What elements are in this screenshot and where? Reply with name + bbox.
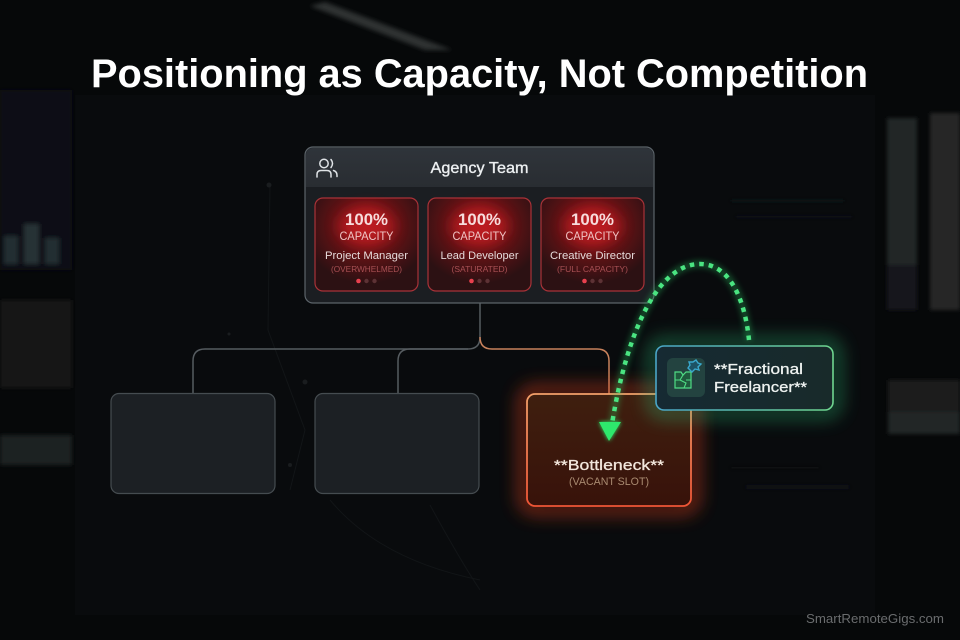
card: lead developer: 100% bbox=[458, 210, 501, 229]
panel: fractional freelancer: Freelancer** bbox=[714, 380, 807, 396]
panel: bottleneck vacant slot: **Bottleneck** bbox=[554, 458, 664, 474]
card: project manager: CAPACITY bbox=[340, 231, 394, 243]
card: lead developer: Lead Developer bbox=[440, 250, 519, 262]
empty role box: left bbox=[111, 394, 275, 494]
panel: fractional freelancer: **Fractional bbox=[714, 362, 803, 378]
panel heading: Agency Team bbox=[430, 160, 528, 177]
panel: bottleneck vacant slot: (VACANT SLOT) bbox=[569, 476, 649, 488]
card: creative director: CAPACITY bbox=[566, 231, 620, 243]
panel: agency team bbox=[305, 147, 654, 303]
panel: bottleneck vacant slot bbox=[524, 391, 694, 509]
panel: fractional freelancer bbox=[653, 343, 836, 413]
icon: puzzle and gear bbox=[667, 358, 705, 397]
card: creative director: (FULL CAPACITY) bbox=[557, 264, 628, 274]
card: creative director: 100% bbox=[571, 210, 614, 229]
title: Positioning as Capacity, Not Competition bbox=[91, 52, 868, 96]
card: lead developer bbox=[428, 198, 531, 291]
card: lead developer: CAPACITY bbox=[452, 231, 507, 243]
card: project manager: (OVERWHELMED) bbox=[331, 264, 402, 274]
card: lead developer: (SATURATED) bbox=[452, 264, 508, 274]
card: creative director: Creative Director bbox=[550, 250, 635, 262]
org chart connector lines bbox=[193, 303, 609, 394]
arrow: freelancer fills the vacant slot bbox=[599, 264, 749, 441]
card: project manager bbox=[315, 198, 418, 291]
empty role box: middle bbox=[315, 394, 479, 494]
icon: team people bbox=[317, 159, 337, 177]
card: project manager: 100% bbox=[345, 210, 388, 229]
card: creative director bbox=[541, 198, 644, 291]
watermark: SmartRemoteGigs.com bbox=[806, 612, 944, 626]
card: project manager: Project Manager bbox=[325, 250, 408, 262]
